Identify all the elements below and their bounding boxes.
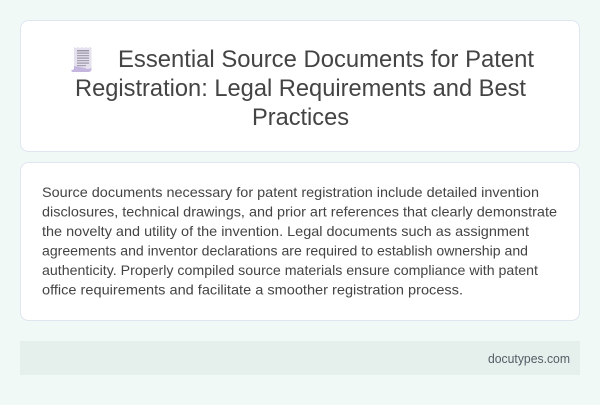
- text block: description: the novelty and utility of the invention. Legal documents such as assignment: [42, 223, 529, 239]
- title: [75, 46, 534, 131]
- title: Essential Source Documents for Patent: [118, 46, 534, 73]
- panel: title card: [20, 20, 580, 152]
- title: Registration: Legal Requirements and Best: [75, 75, 526, 102]
- text block: description: [42, 184, 557, 298]
- footer source text: docutypes.com: [488, 351, 570, 366]
- panel: footer bar: [20, 341, 580, 375]
- text block: description: disclosures, technical drawings, and prior art references that clearly demonstrate: [42, 204, 557, 220]
- text block: description: Source documents necessary for patent registration include detailed invention: [42, 184, 539, 200]
- icon: document receipt: [71, 47, 92, 72]
- panel: description card: [20, 162, 580, 320]
- title: Practices: [252, 104, 349, 131]
- text block: description: agreements and inventor declarations are required to establish ownership and: [42, 242, 528, 258]
- text block: description: authenticity. Properly compiled source materials ensure compliance with patent: [42, 262, 538, 278]
- text block: description: office requirements and facilitate a smoother registration process.: [42, 282, 463, 298]
